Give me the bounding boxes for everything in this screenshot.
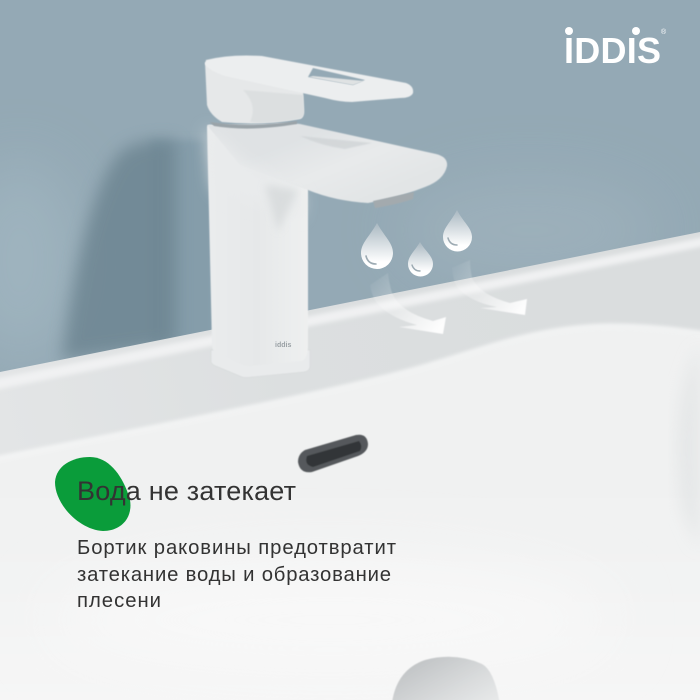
handle facet [243,90,304,123]
basin deck [0,232,700,700]
overflow opening [306,441,361,467]
chrome ring [210,121,297,129]
icon: water flow arrow right [452,260,527,315]
faucet brand mark: iddis [275,342,291,349]
wall light patches [0,160,660,360]
basin lower glow [50,560,610,680]
handle body [205,62,304,123]
description text: затекание воды и образование [77,564,391,586]
spout top recess [300,136,372,149]
heading: Вода не затекает [77,476,296,506]
bowl edge highlight [0,326,700,462]
description text [77,537,396,612]
icon: water flow arrow left [370,273,446,334]
lever with loop [205,56,413,102]
brand logo: IDDIS [564,30,661,71]
faucet base plate [211,350,310,378]
overflow drain [298,435,368,472]
body shading [265,185,298,232]
description text: плесени [77,590,161,612]
spout blend into body [207,128,300,215]
brand logo: ® [661,28,667,36]
green accent blob [55,457,130,531]
faucet body [207,125,308,366]
wall background [0,0,700,400]
icon: water drop medium [443,210,472,252]
bottom drain plug [391,657,502,700]
faucet [205,56,447,378]
aerator [373,192,414,208]
icon: water drop large [361,223,393,269]
washbasin [0,232,700,700]
basin bowl [0,326,700,700]
lever loop inner shading [309,76,364,85]
bowl right wall shading [678,345,700,550]
icon: water drop small [408,242,433,276]
rim highlight [0,237,700,390]
overflow outer ring [298,435,368,472]
spout [207,123,447,203]
description text: Бортик раковины предотвратит [77,537,396,559]
faucet shadow on wall [62,140,215,360]
